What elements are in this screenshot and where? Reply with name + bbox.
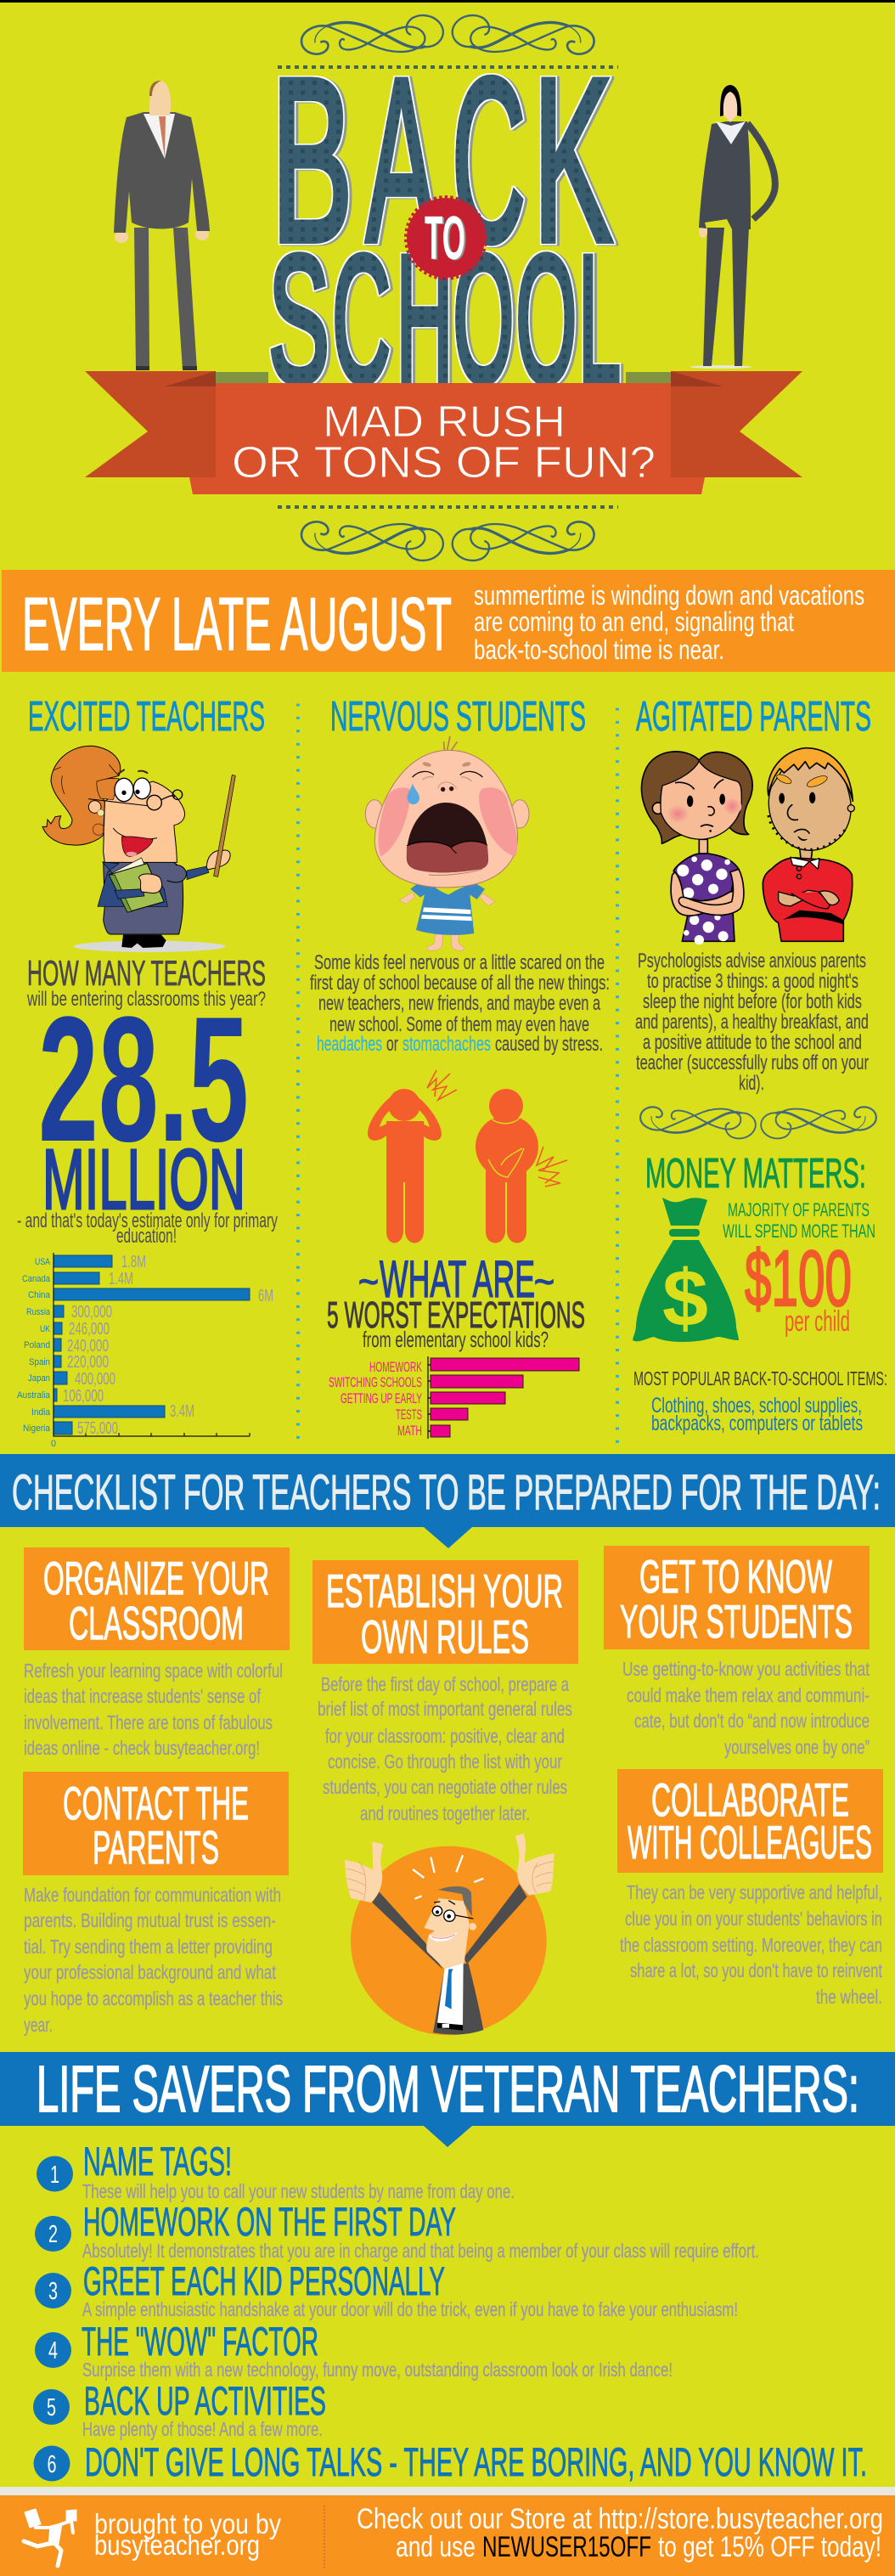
heading: nervous students: NERVOUS STUDENTS	[330, 694, 586, 740]
bar chart: teachers per country: 3.4M	[170, 1402, 194, 1421]
title: BACK SCHOOL: S	[268, 218, 329, 420]
bar chart: teachers per country: 400,000	[75, 1370, 115, 1389]
panel: establish your own rules: ESTABLISH YOUR	[326, 1564, 563, 1617]
bar chart: teachers per country: 0	[51, 1439, 56, 1449]
panel: contact the parents: PARENTS	[93, 1821, 219, 1874]
text block: agitated parents	[635, 950, 869, 1095]
tip 1: name tags: These will help you to call your new students by name from day one.	[82, 2180, 515, 2202]
icon: money bag: $	[662, 1254, 708, 1344]
text block: nervous students: headaches	[317, 1033, 382, 1056]
tip 1: name tags: NAME TAGS!	[83, 2139, 232, 2184]
bar chart: teachers per country: USA	[35, 1257, 51, 1267]
badge: TO	[407, 198, 485, 278]
bar chart: teachers per country: 106,000	[63, 1387, 104, 1406]
tip 5: back up activities: 5	[47, 2394, 56, 2421]
panel: contact the parents: Make foundation for communication with	[24, 1884, 281, 1906]
footer: NEWUSER15OFF	[482, 2531, 651, 2563]
panel: organize your classroom: CLASSROOM	[69, 1597, 244, 1649]
panel: organize your classroom: ideas online - check busyteacher.org!	[24, 1737, 260, 1759]
panel: establish your own rules: concise. Go through the list with your	[328, 1750, 562, 1773]
bar chart: teachers per country: China	[28, 1290, 51, 1300]
heading: what are: WHAT ARE	[380, 1250, 535, 1308]
bar chart: teachers per country: 220,000	[67, 1353, 109, 1372]
ornament: bottom flourish	[301, 521, 594, 561]
panel: every late august banner	[2, 570, 895, 672]
illustration: angry parents	[641, 748, 854, 944]
callout: parents spend: per child	[785, 1305, 850, 1338]
tip 3: greet each kid personally: GREET EACH KID PERSONALLY	[83, 2258, 445, 2303]
ribbon text: MAD RUSH	[323, 397, 566, 447]
text block: nervous students: new teachers, new friends, and maybe even a	[318, 992, 600, 1015]
illustration: businessman	[114, 81, 210, 370]
tip 4: the wow factor: Surprise them with a new technology, funny move, outstanding classroom look or Irish dance!	[82, 2359, 673, 2381]
bar chart: teachers per country: Australia	[17, 1390, 51, 1401]
bar chart: teachers per country: 575,000	[77, 1419, 118, 1438]
heading: what are: ~	[358, 1261, 379, 1303]
bar chart: worst expectations	[329, 1356, 579, 1439]
bar chart: teachers per country: 240,000	[67, 1337, 109, 1356]
panel: contact the parents: year.	[24, 2014, 53, 2036]
text block: nervous students: new school. Some of them may even have	[329, 1013, 589, 1036]
tip 5: back up activities: Have plenty of those! And a few more.	[82, 2418, 323, 2440]
text: L	[578, 218, 621, 420]
banner heading: EVERY LATE AUGUST	[22, 582, 452, 666]
footer	[0, 2487, 895, 2576]
illustration: thumbs up teacher	[345, 1834, 554, 2035]
bar chart: worst expectations: HOMEWORK	[369, 1359, 422, 1375]
panel: organize your classroom: involvement. There are tons of fabulous	[24, 1711, 273, 1733]
stat: how many teachers: education!	[116, 1225, 177, 1248]
column dividers	[298, 703, 617, 1444]
stat: how many teachers: - and that's today's estimate only for primary	[17, 1209, 278, 1232]
title: BACK SCHOOL: C	[332, 218, 391, 420]
panel: establish your own rules: students, you can negotiate other rules	[323, 1776, 567, 1798]
panel: organize your classroom	[24, 1547, 290, 1759]
panel: contact the parents	[23, 1772, 289, 2036]
heading: what are	[358, 1250, 554, 1308]
text block: nervous students: caused by stress.	[495, 1033, 603, 1056]
panel: get to know your students	[604, 1546, 870, 1758]
illustration: crying child	[365, 736, 529, 951]
big number: 28.5: 28.5	[38, 979, 249, 1179]
tip 6: long talks: 6	[48, 2451, 56, 2478]
banner text	[474, 580, 864, 665]
tip 1: name tags: 1	[50, 2162, 59, 2189]
icon: figures in pain	[368, 1070, 567, 1243]
brand text: brought to you by	[94, 2508, 281, 2539]
title: BACK SCHOOL: B	[272, 31, 353, 290]
title: BACK SCHOOL: K	[533, 31, 612, 290]
panel: establish your own rules: Before the first day of school, prepare a	[321, 1673, 569, 1695]
panel: organize your classroom: Refresh your learning space with colorful	[24, 1660, 283, 1682]
footer: and use	[396, 2531, 476, 2563]
bar chart: teachers per country: UK	[40, 1324, 51, 1334]
bar chart: teachers per country: 246,000	[69, 1320, 110, 1339]
ribbon banner	[85, 371, 802, 494]
stat: how many teachers: HOW MANY TEACHERS	[27, 953, 266, 993]
dotted rule below title	[278, 505, 618, 509]
title: BACK SCHOOL: O	[453, 218, 514, 420]
bar chart: worst expectations: MATH	[397, 1423, 422, 1439]
bar chart: teachers per country: Spain	[29, 1357, 50, 1367]
badge: TO: TO	[425, 205, 465, 273]
bar chart: teachers per country: 300,000	[71, 1303, 112, 1322]
panel: contact the parents: tial. Try sending them a letter providing	[24, 1936, 273, 1958]
tip 2: homework on the first day: HOMEWORK ON THE FIRST DAY	[83, 2199, 456, 2244]
bar chart: worst expectations: TESTS	[396, 1406, 422, 1423]
banner text: are coming to an end, signaling that	[474, 606, 794, 637]
bar chart: teachers per country: Russia	[26, 1307, 51, 1317]
text block: nervous students: first day of school because of all the new things:	[310, 972, 610, 995]
heading: what are: ~	[534, 1261, 554, 1303]
footer: busyteacher.org	[94, 2529, 260, 2561]
bar chart: teachers per country: Nigeria	[23, 1423, 51, 1434]
icon: running teacher	[24, 2509, 76, 2566]
panel: collaborate with colleagues	[617, 1769, 883, 2008]
bar chart: teachers per country: Poland	[24, 1340, 50, 1350]
panel: organize your classroom: ideas that increase students' sense of	[24, 1685, 261, 1707]
big label: million: MILLION	[42, 1132, 245, 1227]
banner text: back-to-school time is near.	[474, 634, 724, 665]
bar chart: teachers per country: 1.4M	[109, 1270, 133, 1288]
panel: establish your own rules: and routines together later.	[360, 1802, 530, 1824]
callout: parents spend	[723, 1199, 875, 1338]
panel: contact the parents: your professional background and what	[24, 1961, 276, 1983]
panel: contact the parents: parents. Building mutual trust is essen-	[24, 1909, 276, 1931]
tip 1: name tags	[37, 2139, 515, 2202]
bar chart: worst expectations: SWITCHING SCHOOLS	[329, 1374, 422, 1390]
title: BACK SCHOOL: O	[515, 218, 577, 420]
ribbon text: OR TONS OF FUN?	[232, 438, 656, 488]
text block: popular items	[633, 1367, 887, 1435]
ornament: top flourish	[301, 15, 594, 54]
heading: excited teachers: EXCITED TEACHERS	[28, 694, 265, 740]
tip 5: back up activities	[33, 2378, 326, 2440]
figure: headache	[368, 1089, 442, 1243]
tip 4: the wow factor: 4	[48, 2337, 58, 2365]
tip 5: back up activities: BACK UP ACTIVITIES	[84, 2378, 326, 2423]
panel: establish your own rules: for your classroom: positive, clear and	[325, 1725, 565, 1747]
icon: pain bolts	[427, 1070, 567, 1187]
illustration: businesswoman	[690, 85, 775, 369]
text block: nervous students	[310, 951, 610, 1056]
stat: how many teachers: will be entering classrooms this year?	[26, 988, 266, 1011]
tip 4: the wow factor: THE "WOW" FACTOR	[82, 2319, 318, 2364]
heading: 5 worst expectations: 5 WORST EXPECTATIONS	[327, 1294, 585, 1336]
mother	[641, 752, 752, 944]
text block: agitated parents: kid).	[739, 1072, 764, 1095]
panel: establish your own rules: OWN RULES	[361, 1610, 529, 1663]
figure: stomach ache	[476, 1089, 538, 1243]
heading: 5 worst expectations: from elementary school kids?	[363, 1327, 549, 1352]
title: BACK SCHOOL	[268, 31, 621, 420]
panel: establish your own rules: brief list of most important general rules	[318, 1698, 572, 1720]
bar chart: teachers per country: Japan	[28, 1373, 50, 1384]
dotted rule above title	[278, 65, 618, 69]
bar chart: teachers per country: 1.8M	[121, 1253, 146, 1271]
panel: organize your classroom: ORGANIZE YOUR	[43, 1552, 269, 1604]
bar chart: teachers per country	[17, 1253, 273, 1449]
bar chart: teachers per country: India	[31, 1407, 51, 1418]
badge: TO: TO	[426, 206, 467, 273]
banner: checklist heading	[0, 1454, 895, 1548]
tip 3: greet each kid personally: 3	[48, 2278, 58, 2305]
olive band behind title	[216, 372, 671, 383]
stat: how many teachers	[17, 953, 278, 1248]
text block: nervous students: Some kids feel nervous or a little scared on the	[314, 951, 605, 974]
ribbon text	[232, 397, 656, 488]
tip 2: homework on the first day: 2	[48, 2221, 58, 2248]
bar chart: worst expectations: GETTING UP EARLY	[341, 1390, 422, 1406]
panel: contact the parents: CONTACT THE	[63, 1777, 249, 1829]
bar chart: teachers per country: Canada	[22, 1274, 51, 1284]
tip 3: greet each kid personally	[35, 2258, 738, 2320]
title: BACK SCHOOL: A	[366, 31, 437, 290]
illustration: teacher	[42, 746, 235, 952]
father	[763, 748, 854, 941]
text block: nervous students: or	[386, 1033, 398, 1056]
panel: contact the parents: you hope to accomplish as a teacher this	[24, 1987, 283, 2010]
icon: money bag	[633, 1198, 739, 1344]
title: BACK SCHOOL: C	[452, 31, 526, 290]
title: BACK SCHOOL: H	[397, 218, 453, 420]
text block: nervous students: stomachaches	[402, 1033, 491, 1056]
panel: establish your own rules	[312, 1560, 578, 1824]
ornament: money section flourish	[640, 1107, 876, 1138]
tip 2: homework on the first day	[35, 2199, 759, 2262]
heading: 5 worst expectations	[327, 1294, 585, 1352]
tip 4: the wow factor	[35, 2319, 673, 2381]
bar chart: teachers per country: 6M	[258, 1287, 273, 1305]
